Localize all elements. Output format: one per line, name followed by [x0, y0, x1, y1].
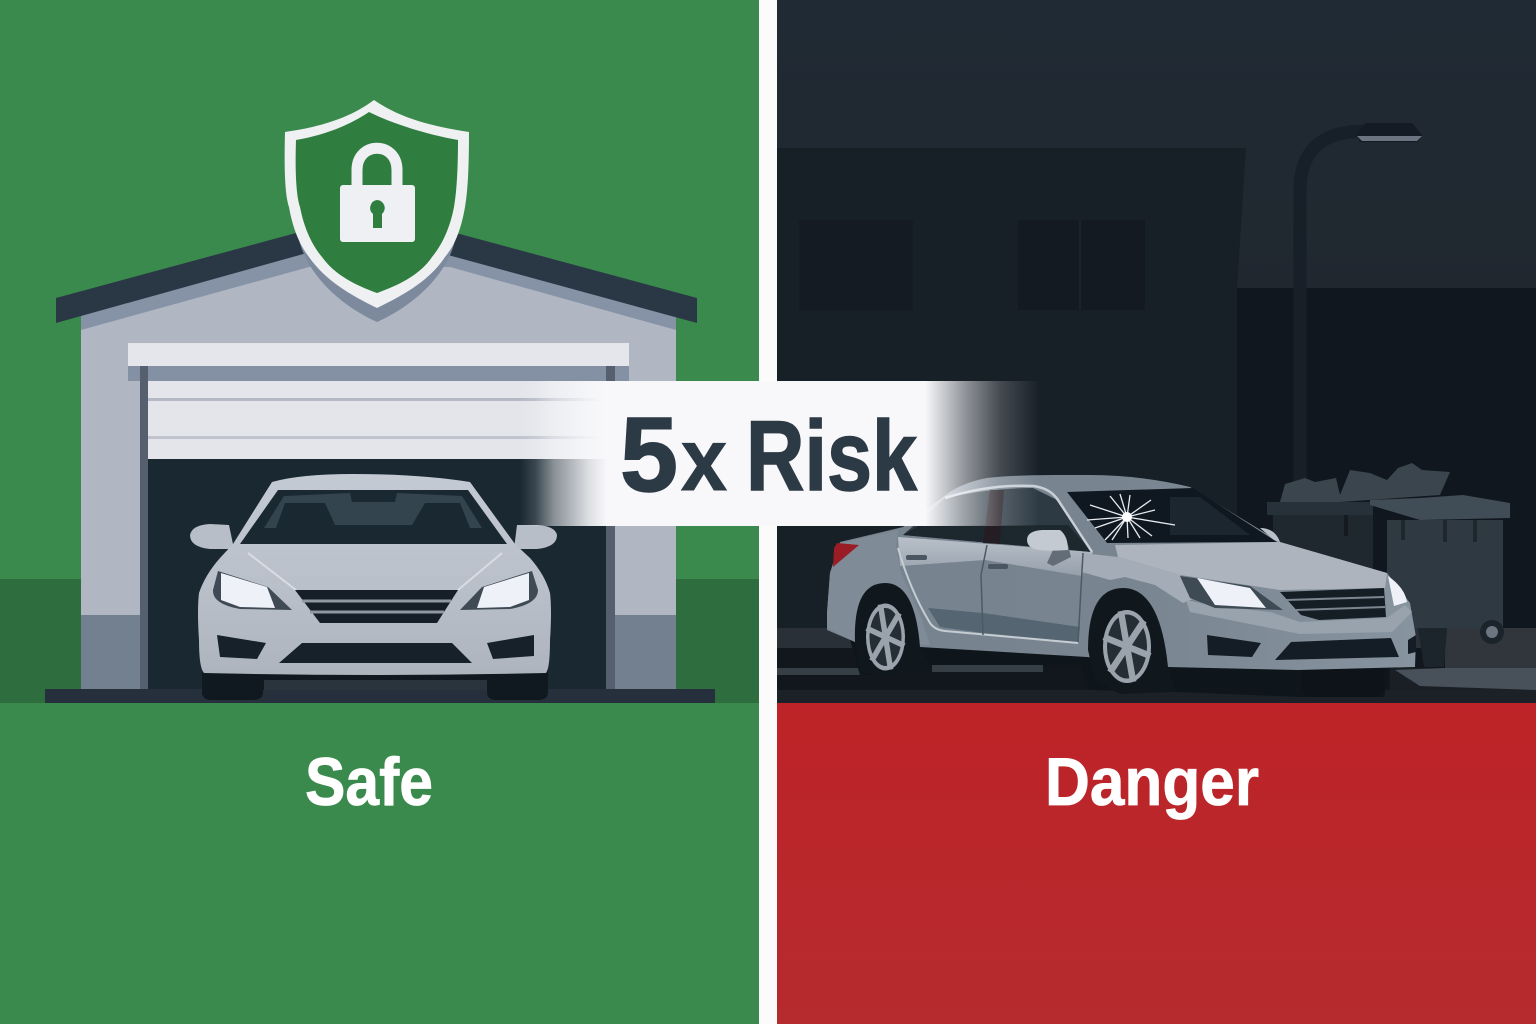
hood: [1115, 542, 1387, 590]
car body: [198, 474, 551, 675]
left mirror: [190, 524, 234, 549]
right mirror: [514, 525, 557, 549]
window lower tint: [903, 525, 1092, 552]
crack impact point: [1122, 512, 1132, 522]
digit 5: 5: [620, 396, 678, 514]
windshield crack: [1087, 494, 1175, 540]
interior mirror and seats: [264, 493, 482, 528]
grille bar: [310, 610, 444, 614]
panel: danger: [777, 0, 1536, 1024]
wall base right: [615, 615, 676, 689]
left dumpster body: [1273, 515, 1373, 575]
fog vent: [1207, 635, 1261, 657]
label: Danger: Danger: [1045, 744, 1259, 820]
multiplier x: x: [681, 410, 727, 509]
sill chrome and rear door edge: [898, 548, 1078, 643]
lower door shade: [928, 608, 1080, 642]
lamp head: [1357, 123, 1422, 142]
label: Safe: Safe: [305, 744, 433, 820]
hood crease right: [458, 553, 502, 590]
front fender highlight: [1082, 553, 1195, 603]
rear rim spokes: [867, 604, 904, 670]
green background: [0, 0, 759, 1024]
shield border: [285, 100, 469, 308]
side car with broken windshield: [827, 475, 1416, 697]
hood crease left: [248, 553, 296, 590]
header shadow: [128, 366, 629, 381]
street lamp: [1300, 123, 1422, 520]
side mirror: [1027, 530, 1068, 551]
side windows: [903, 488, 1092, 552]
rear door handle: [906, 555, 927, 560]
valance strip: [264, 680, 487, 690]
front door handle: [988, 564, 1008, 569]
red danger band: [777, 703, 1536, 1024]
front rim recess: [1107, 614, 1147, 678]
grille: [295, 590, 458, 623]
door slat line: [148, 436, 598, 439]
left dumpster rib: [1344, 515, 1348, 536]
right headlight: [477, 573, 529, 608]
keyhole: [370, 200, 385, 228]
rear quarter: [827, 530, 930, 645]
trash bags: [1280, 463, 1450, 502]
road strip: [1182, 679, 1308, 688]
road lower tone: [777, 690, 1536, 703]
door header: [128, 343, 629, 366]
windshield: [1067, 488, 1277, 543]
dumpsters: [1267, 463, 1510, 667]
road strip: [932, 665, 1043, 672]
dumpster leg: [1418, 628, 1447, 667]
front rim spokes: [1104, 611, 1150, 682]
right headlight surround: [460, 571, 538, 610]
windshield: [240, 490, 507, 544]
callout banner: 5x Risk: [520, 381, 1040, 526]
far headlight: [1388, 576, 1407, 606]
left headlight: [221, 573, 275, 608]
rear rim: [866, 604, 905, 670]
door post right: [606, 366, 615, 689]
roof shadow: [81, 250, 676, 330]
grille bar: [1296, 607, 1385, 610]
shield shadow: [298, 236, 456, 322]
front wheel arch and tyre: [1088, 588, 1176, 694]
rear wheel arch and tyre: [855, 583, 932, 677]
left headlight surround: [213, 571, 292, 610]
window mullion: [1079, 220, 1081, 310]
rear rim recess: [870, 608, 902, 666]
grille: [1280, 588, 1386, 620]
shadow under car: [850, 640, 1390, 697]
grille bar: [302, 600, 451, 602]
garage: [45, 233, 715, 703]
door line front: [1078, 553, 1083, 642]
pavement right: [1445, 628, 1536, 670]
car body: [827, 475, 1416, 670]
lamp pole: [1300, 131, 1365, 520]
far front tyre: [1301, 660, 1384, 697]
grille bar: [1286, 597, 1384, 600]
pavement far: [777, 628, 1536, 648]
back wall: [1237, 288, 1536, 703]
roller door: [148, 381, 606, 459]
banner strip: [520, 381, 1040, 526]
padlock shackle: [357, 148, 397, 190]
door slat line: [148, 398, 598, 401]
garage opening: [148, 459, 606, 689]
icon: security shield with padlock: [285, 100, 469, 322]
night sky: [777, 0, 1536, 300]
door post left: [140, 366, 148, 689]
ground: [777, 628, 1536, 703]
word Risk: Risk: [746, 400, 918, 511]
headlight surround: [1180, 576, 1283, 610]
garage wall: [81, 248, 676, 689]
building: [777, 148, 1246, 703]
tail light: [833, 543, 859, 567]
right dumpster lid: [1370, 495, 1510, 520]
headlight: [1197, 578, 1266, 608]
road strip: [777, 668, 865, 675]
shield face: [296, 112, 458, 293]
ground slab: [45, 689, 715, 703]
right fog vent: [487, 635, 534, 659]
wheel hub: [1486, 626, 1498, 638]
door upper highlight: [898, 537, 1093, 576]
left dumpster lid: [1267, 502, 1373, 515]
dumpster wheel: [1480, 620, 1504, 644]
front tyres and underbody: [202, 665, 548, 700]
window chrome: [945, 486, 1092, 552]
b pillar: [983, 490, 1004, 544]
door line middle: [981, 545, 987, 635]
corner vent: [1408, 635, 1416, 654]
window right: [1018, 220, 1145, 310]
grass band: [0, 579, 759, 703]
road dark right: [1390, 668, 1536, 703]
wall base left: [81, 615, 141, 689]
lower intake: [279, 643, 472, 663]
lower intake: [1275, 638, 1399, 660]
front car: [190, 474, 557, 700]
padlock body: [340, 185, 415, 242]
far mirror: [1260, 528, 1280, 542]
pavement highlight: [1395, 668, 1536, 690]
window left: [799, 220, 913, 310]
lamp light: [1357, 136, 1422, 141]
windshield interior: [1170, 497, 1250, 535]
left fog vent: [217, 635, 266, 659]
road shadow: [777, 648, 1417, 703]
right dumpster ribs: [1401, 520, 1477, 542]
bumper highlight: [1186, 600, 1412, 634]
right dumpster body: [1387, 520, 1503, 628]
mirror stem: [1040, 545, 1071, 566]
panel: safe: [0, 0, 759, 1024]
front rim: [1103, 610, 1151, 683]
roof: [56, 233, 697, 323]
